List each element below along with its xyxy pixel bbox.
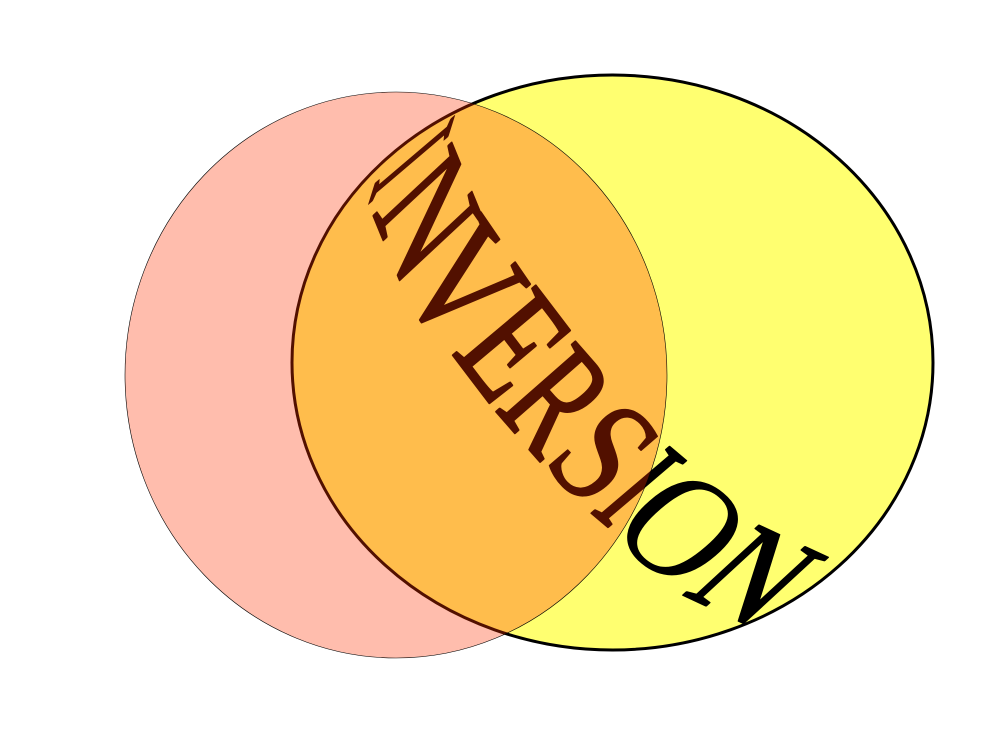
word: INVERSION: [342, 90, 857, 651]
word: INVERSION: O: [578, 439, 788, 617]
red circle: [125, 92, 667, 658]
word: INVERSION: I: [563, 421, 716, 552]
word: INVERSION: S: [514, 370, 696, 533]
word: INVERSION: N: [346, 113, 511, 316]
word: INVERSION: E: [424, 258, 606, 432]
word: INVERSION: I: [342, 90, 482, 229]
yellow circle: [292, 75, 933, 650]
word: INVERSION: V: [370, 186, 561, 380]
word: INVERSION: N: [655, 499, 857, 651]
word: INVERSION: R: [467, 315, 647, 485]
